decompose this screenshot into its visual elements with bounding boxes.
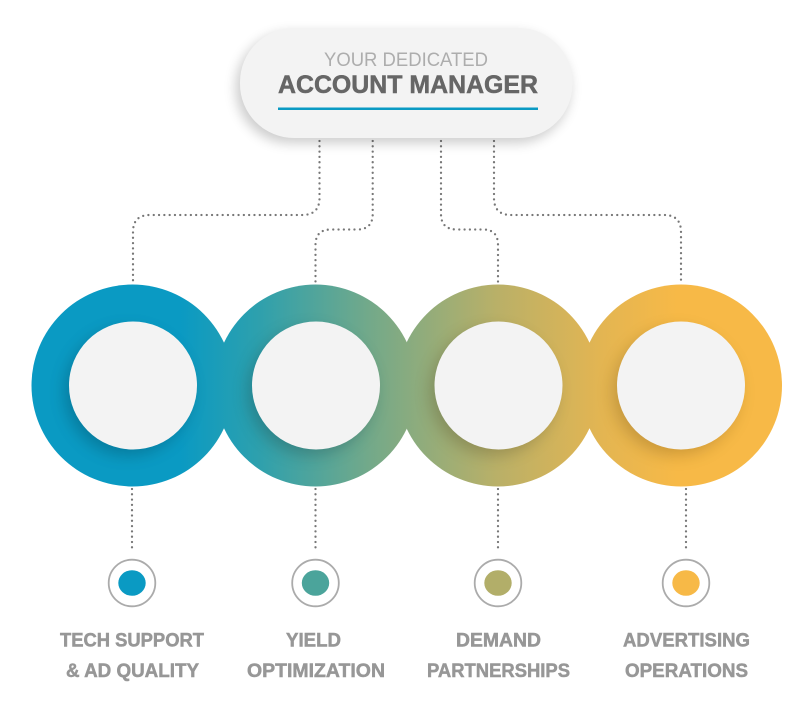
label: tech support and ad quality: TECH SUPPORT	[60, 630, 204, 652]
connector: demand partnerships to manager	[441, 141, 498, 285]
connector: circle to yield marker	[314, 489, 317, 552]
label: demand partnerships	[427, 630, 570, 682]
label: tech support and ad quality	[60, 630, 204, 682]
panel: advertising operations circle	[613, 322, 745, 455]
label: yield optimization	[247, 630, 385, 682]
label: advertising operations: ADVERTISING	[623, 630, 750, 652]
panel: account manager card	[236, 28, 572, 143]
gradient ring band	[32, 284, 782, 486]
label: advertising operations: OPERATIONS	[625, 661, 748, 682]
heading underline	[278, 108, 538, 110]
panel: tech support circle	[65, 322, 197, 455]
marker: tech support	[109, 560, 155, 606]
heading: account manager: ACCOUNT MANAGER	[278, 71, 538, 99]
marker: demand partnerships	[475, 560, 521, 606]
connector: tech support to manager	[133, 141, 320, 281]
marker: yield optimization	[292, 560, 339, 606]
label: yield optimization: YIELD	[286, 630, 341, 652]
connector: circle to tech support marker	[131, 489, 133, 552]
panel: demand partnerships circle	[430, 322, 562, 455]
label: advertising operations	[623, 630, 750, 682]
heading: your dedicated: YOUR DEDICATED	[324, 49, 488, 71]
panel: yield optimization circle	[248, 322, 380, 455]
connector: advertising operations to manager	[494, 141, 681, 281]
connector: circle to advertising marker	[685, 489, 687, 552]
label: demand partnerships: DEMAND	[456, 630, 541, 652]
connector: circle to demand marker	[497, 489, 499, 552]
connector: yield optimization to manager	[316, 141, 373, 285]
label: demand partnerships: PARTNERSHIPS	[427, 661, 570, 682]
label: tech support and ad quality: & AD QUALITY	[66, 661, 199, 682]
label: yield optimization: OPTIMIZATION	[247, 661, 385, 682]
marker: advertising operations	[663, 560, 709, 606]
